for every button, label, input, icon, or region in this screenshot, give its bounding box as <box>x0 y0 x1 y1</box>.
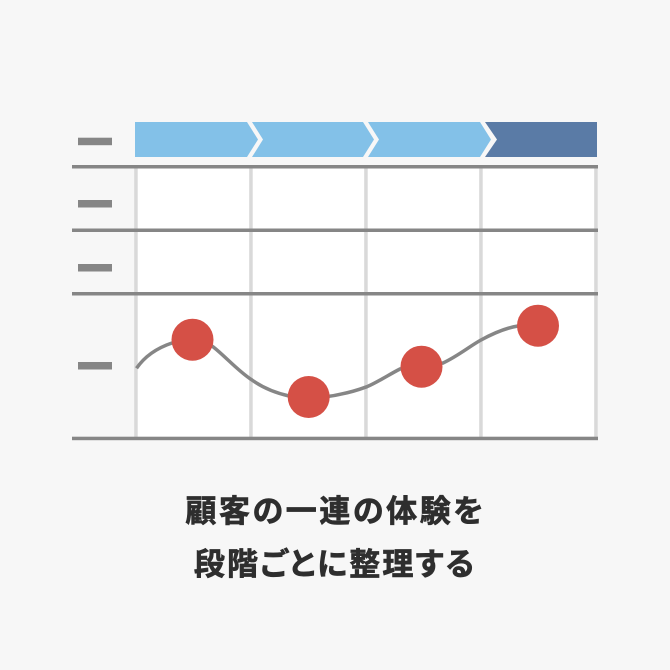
experience curve <box>136 326 518 397</box>
row label placeholders <box>78 138 112 370</box>
arrow: stage 2 <box>252 122 374 157</box>
experience points <box>172 305 559 418</box>
arrow: stage 1 <box>135 122 258 157</box>
caption <box>185 494 486 582</box>
arrow: stage 4 <box>485 122 597 157</box>
caption: 段階ごとに整理する <box>194 547 476 582</box>
journey map table <box>72 165 598 440</box>
caption: 顧客の一連の体験を <box>185 494 486 529</box>
stage arrows <box>135 122 597 157</box>
arrow: stage 3 <box>368 122 491 157</box>
